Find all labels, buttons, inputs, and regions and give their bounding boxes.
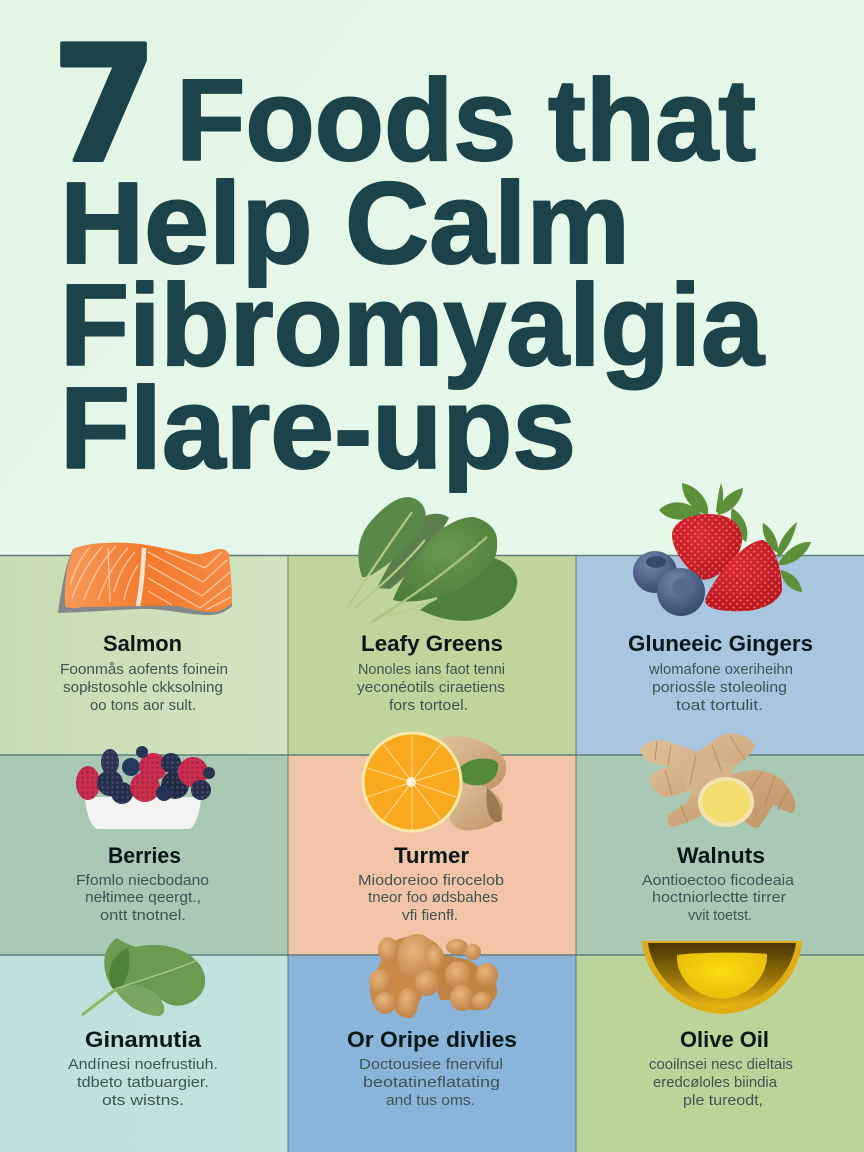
panel: turmeric [358,732,506,924]
description: cooilnsei nesc dieltais [649,1057,793,1073]
description [357,662,505,714]
description: hoctniorlectte tirrer [652,890,786,906]
heading: Or Oripe divlies [347,1027,517,1052]
heading: Walnuts [677,843,765,868]
icon: salmon fillet [58,543,232,615]
heading: Turmer [394,843,469,868]
panel: berries [76,746,215,924]
icon: walnut [369,934,498,1018]
description: beotatineflatating [363,1075,500,1091]
description: Ffomlo niecbodano [76,873,209,889]
description [648,662,793,714]
panel: or oripe divlies [347,934,517,1109]
title: Foods that [176,55,756,185]
description: toat tortulit. [676,698,763,714]
icon: orange and ginger [362,732,506,832]
description: tneor foo ødsbahes [368,890,498,906]
description: oo tons aor sult. [90,698,196,714]
description: yeconéotils ciraetiens [357,680,505,696]
icon: spinach leaves [348,497,517,622]
icon: olive oil bowl [642,941,802,1014]
title: 7 [52,11,157,198]
description: wlomafone oxeriheihn [648,662,793,678]
title: Help Calm [60,158,630,288]
heading: Salmon [103,631,182,656]
description [649,1057,793,1109]
panel: gluneeic gingers [628,483,813,714]
panel backgrounds grid [0,556,864,1152]
panel: leafy greens [348,497,517,714]
description: Andínesi noefrustiuh. [68,1057,218,1073]
description: Aontioectoo ficodeaia [642,873,795,889]
description: fors tortoel. [389,698,468,714]
description: eredcøloles biindia [653,1075,778,1091]
description: Doctousiee fnerviful [359,1057,503,1073]
description: Nonoles ians faot tenni [358,662,505,678]
description [68,1057,218,1109]
description: tdbeto tatbuargier. [77,1075,209,1091]
panel: ginamutia [68,938,218,1109]
heading: Leafy Greens [361,631,503,656]
description: ontt tnotnel. [100,908,186,924]
description: and tus oms. [386,1093,475,1109]
title: Fibromyalgia [60,260,765,390]
description [359,1057,503,1109]
icon: ginger root [640,734,795,828]
description: poriosśle stoleoling [652,680,787,696]
panel: olive oil [642,941,802,1109]
description [642,873,795,924]
description: vfi fienfł. [402,908,458,924]
description [358,873,504,924]
description: sopłstosohle ckksolning [63,680,223,696]
heading: Gluneeic Gingers [628,631,813,656]
description: ots wistns. [102,1093,184,1109]
icon: green leaf [82,938,205,1016]
icon: bowl of berries [76,746,215,829]
description: vvit toetst. [688,908,752,924]
heading: Berries [108,843,181,868]
heading: Ginamutia [85,1027,202,1052]
heading: Olive Oil [680,1027,769,1052]
description: Foonmås aofents foinein [60,662,228,678]
icon: strawberries and blueberries [633,483,811,616]
panel: salmon [58,543,232,714]
description: Miodoreioo firocelob [358,873,504,889]
description [60,662,228,714]
panel: walnuts [640,734,795,924]
title [52,11,765,493]
description: nełtimee qeergt., [85,890,201,906]
description: ple tureodt, [683,1093,763,1109]
title: Flare-ups [60,363,576,493]
description [76,873,209,924]
